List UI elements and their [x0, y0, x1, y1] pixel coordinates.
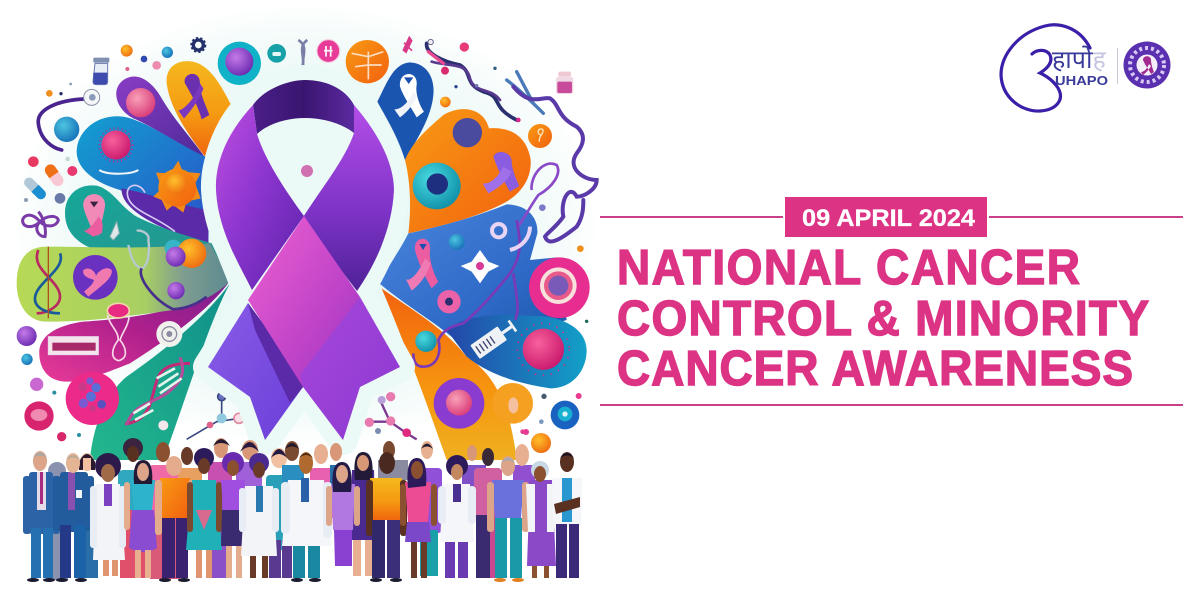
icon: stethoscope right: [413, 164, 558, 367]
icon: teal cell: [218, 42, 261, 85]
icon: small purple disc: [167, 282, 185, 299]
icon: pink ribbon on blue: [406, 239, 438, 291]
person: man white coat: [552, 452, 582, 578]
icon: orange disc: [528, 124, 552, 148]
ribbon: left band: [216, 105, 304, 290]
icon: gear: [191, 38, 205, 52]
title: NATIONAL CANCER: [617, 241, 1080, 295]
person: man in navy suit: [53, 453, 94, 582]
pink bead: [301, 165, 313, 177]
ribbon halo: [208, 80, 400, 440]
icon: orange bean disc: [492, 383, 533, 424]
icon: cartridge: [48, 337, 98, 355]
illustration: left petal fan: [17, 38, 307, 460]
ribbon: right tail: [300, 297, 400, 440]
icon: hook line: [127, 185, 175, 232]
icon: blue cell: [54, 117, 79, 142]
icon: atom flower: [461, 250, 499, 283]
person: doctor with afro: [90, 453, 126, 576]
person: man yellow shirt: [366, 452, 407, 582]
decorative spheres top: [46, 45, 173, 97]
petal: blue: [77, 116, 210, 243]
petal: lime: [17, 243, 230, 322]
icon: dna bottom: [125, 357, 190, 425]
person: woman teal dress: [186, 448, 222, 578]
icon: capsule: [43, 162, 66, 188]
decorative spheres lower: [375, 428, 551, 453]
logo: emblem: [1124, 42, 1170, 88]
icon: pink ribbon on teal petal: [83, 194, 105, 237]
icon: heart ribbon disc: [73, 255, 118, 300]
icon: pink badge: [317, 40, 340, 62]
petal: lower orange: [382, 288, 517, 460]
icon: syringe molecule: [187, 393, 244, 439]
icon: sphere on stem: [449, 234, 465, 250]
person: woman pink shirt: [400, 458, 437, 578]
date badge: 09 APRIL 2024: [802, 205, 976, 232]
icon: pill blue: [22, 175, 48, 201]
icon: syringe: [470, 318, 518, 359]
icon: blue target: [551, 401, 579, 429]
petal: dark purple fold: [122, 188, 208, 243]
ribbon: left tail shade: [248, 303, 303, 403]
icon: dna strands top: [427, 39, 597, 241]
icon: pink dish: [24, 401, 54, 431]
title: CONTROL & MINORITY: [617, 292, 1149, 346]
person: lead doctor: [281, 452, 332, 582]
petal: teal: [65, 185, 230, 282]
icon: stethoscope left: [38, 89, 100, 150]
petal: yellow orange: [167, 61, 231, 157]
background wash: [10, 3, 600, 447]
petal: orange: [405, 109, 531, 233]
icon: stethoscope magenta: [107, 303, 129, 361]
logo: divider: [1117, 48, 1118, 84]
ribbon: top fold: [253, 80, 354, 134]
icon: teal sphere: [415, 331, 437, 352]
person: doctor dark skin: [239, 453, 279, 578]
crowd of people: [23, 438, 582, 582]
person: woman purple top: [221, 452, 245, 578]
icon: molecule lower: [365, 392, 417, 439]
back row: [48, 438, 535, 580]
petal: large blue: [379, 204, 567, 350]
date badge: [785, 197, 987, 237]
icon: teal cell: [413, 163, 461, 209]
ribbon: left tail: [208, 303, 303, 440]
petal: purple: [116, 77, 205, 157]
person: man blue shirt: [487, 456, 529, 582]
icon: textured sphere: [453, 118, 482, 147]
ribbon: right band: [302, 105, 394, 291]
icon: orange round tree: [346, 40, 389, 83]
icon: vial: [93, 58, 109, 85]
spheres left: [17, 156, 81, 441]
date rule right: [989, 216, 1183, 218]
icon: purple disc button: [434, 378, 484, 429]
dots top right: [440, 42, 588, 434]
icon: virus pink: [99, 128, 133, 162]
icon: purple ribbon on yellow petal: [178, 74, 209, 119]
icon: infinity knot: [23, 212, 58, 237]
person: man in blue suit: [23, 451, 60, 582]
title: CANCER AWARENESS: [617, 342, 1133, 396]
icon: stethoscope green: [128, 231, 207, 309]
icon: cell cluster pink: [66, 372, 119, 425]
date rule left: [600, 216, 783, 218]
person: woman lilac dress: [326, 462, 360, 566]
icon: molecule cluster: [165, 239, 206, 268]
petal: magenta: [39, 281, 230, 382]
icon: violet ribbon: [483, 152, 519, 193]
icon: donut cell: [437, 290, 461, 313]
bottom rule: [600, 404, 1183, 406]
icon: target disc: [529, 257, 590, 318]
illustration: right petal fan: [317, 37, 597, 460]
logo: uhapo swoosh: [1001, 25, 1118, 111]
icon: orange sun cell: [153, 161, 201, 213]
icon: tiny pink ribbon: [403, 37, 412, 52]
icon: ghost glyphs: [110, 222, 119, 240]
person: doctor woman: [438, 455, 476, 578]
icon: teal badge: [267, 44, 286, 63]
petal: dark blue small: [377, 62, 434, 160]
sphere on purple petal: [126, 88, 155, 117]
title: [617, 241, 1149, 396]
icon: dna lime: [35, 247, 61, 318]
ribbon: centre panel: [248, 216, 360, 387]
person: woman teal top: [124, 460, 162, 578]
icon: white shell: [156, 321, 182, 347]
icon: virus large: [517, 323, 569, 375]
icon: pale sphere: [158, 420, 168, 430]
icon: stethoscope bar: [99, 170, 138, 174]
person: man orange shirt: [155, 456, 195, 582]
icon: small dna: [298, 40, 307, 72]
petal: deep blue teal: [447, 315, 587, 388]
awareness ribbon: [208, 80, 400, 440]
person: older woman: [526, 461, 556, 578]
petal: bottom green: [90, 283, 230, 460]
logo: uhapo wordmark: UHAPO: [1055, 74, 1108, 88]
logo: hindi wordmark: हापोह: [1052, 45, 1106, 79]
icon: jar: [556, 72, 573, 94]
icon: chain ring: [492, 224, 530, 250]
icon: white ribbon: [394, 74, 424, 117]
